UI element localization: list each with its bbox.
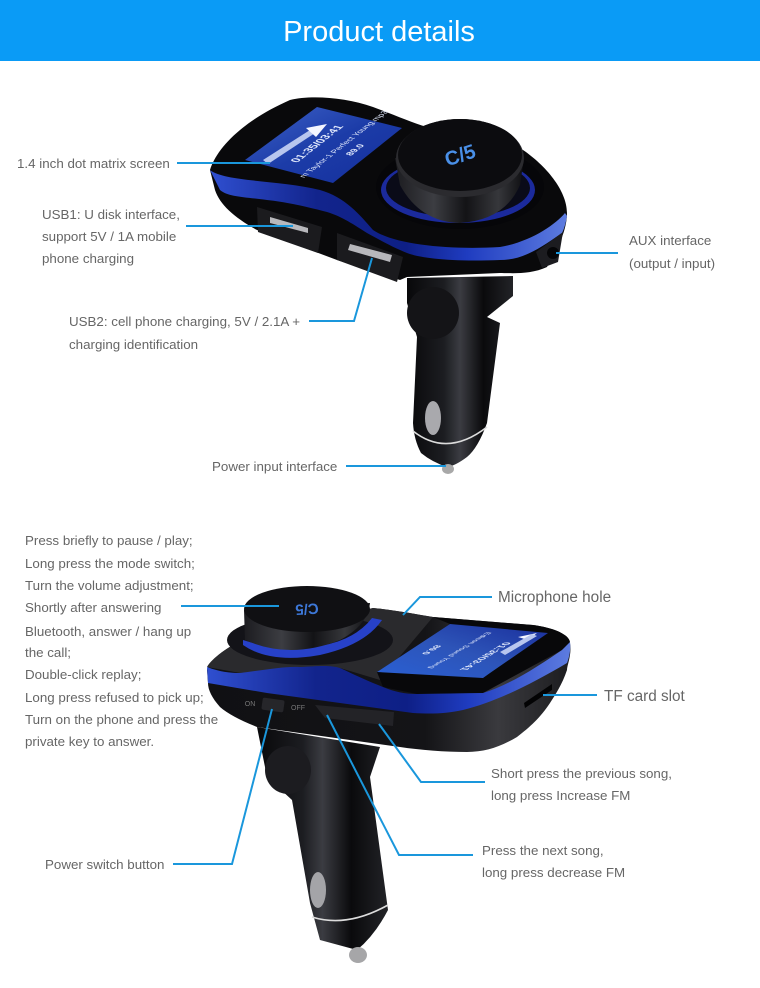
screen: Edison Sound Young (426, 632, 494, 669)
body (210, 97, 567, 280)
label: USB2 (69, 258, 372, 352)
power switch: OFF (291, 705, 305, 712)
knob (227, 615, 393, 665)
product photo: transmitter top view: C/5 (442, 141, 479, 171)
shaft (407, 276, 513, 467)
aux port (536, 232, 563, 268)
blue band (207, 642, 570, 714)
body (207, 608, 570, 752)
label: AUX interface (556, 233, 715, 271)
label: knob functions: Bluetooth, answer / hang up (25, 624, 191, 639)
label: previous song: long press Increase FM (491, 788, 630, 803)
screen: 89.0 (419, 645, 444, 655)
label: knob functions: Turn the volume adjustment; (25, 578, 194, 593)
product photo: transmitter top view (210, 97, 567, 474)
label: USB1: phone charging (42, 251, 134, 266)
power switch (245, 698, 305, 712)
label: power input interface: Power input interface (212, 459, 337, 474)
label: previous song (379, 724, 672, 803)
label: knob functions: Long press refused to pick up; (25, 690, 204, 705)
blue band (210, 170, 567, 261)
usb ports (257, 207, 322, 253)
header banner (0, 0, 760, 61)
label: AUX interface: (output / input) (629, 256, 715, 271)
label: knob functions: private key to answer. (25, 734, 154, 749)
screen: m Taylor-1 Perfect Young.mp3 (297, 110, 391, 178)
screen: 01:35/03:41 (456, 642, 513, 671)
label: knob functions (25, 533, 279, 749)
tf slot (524, 684, 552, 708)
screen: 89.0 (343, 143, 367, 156)
label: knob functions: Double-click replay; (25, 667, 141, 682)
label: USB1: USB1: U disk interface, (42, 207, 180, 222)
label: knob functions: Turn on the phone and press the (25, 712, 218, 727)
label: next song: Press the next song, (482, 843, 604, 858)
product photo: transmitter side view: C/5 (295, 599, 319, 618)
label: USB2: charging identification (69, 337, 198, 352)
buttons (315, 705, 394, 726)
label: TF card slot: TF card slot (604, 688, 685, 705)
label: USB1 (42, 207, 293, 266)
label: next song: long press decrease FM (482, 865, 625, 880)
label: microphone hole: Microphone hole (498, 589, 611, 606)
label: next song (327, 715, 625, 880)
product photo: transmitter side view (207, 586, 570, 963)
label: 1.4 inch dot matrix screen: 1.4 inch dot matrix screen (17, 156, 170, 171)
label: power switch button (45, 709, 272, 872)
screen (377, 624, 548, 678)
label: knob functions: Shortly after answering (25, 600, 161, 615)
screen (245, 107, 402, 183)
label: AUX interface: AUX interface (629, 233, 711, 248)
label: previous song: Short press the previous song, (491, 766, 672, 781)
shaft (257, 727, 388, 950)
screen: 01:35/03:41 (288, 124, 347, 164)
label: USB2: USB2: cell phone charging, 5V / 2.1A + (69, 314, 300, 329)
title: Product details (283, 16, 475, 48)
knob (376, 145, 544, 229)
top surface (207, 608, 433, 680)
label: knob functions: Press briefly to pause / play; (25, 533, 193, 548)
label: USB1: support 5V / 1A mobile (42, 229, 176, 244)
label: knob functions: the call; (25, 645, 71, 660)
label: microphone hole (403, 589, 611, 615)
label: knob functions: Long press the mode switch; (25, 556, 195, 571)
power switch: ON (245, 701, 255, 708)
label: power switch button: Power switch button (45, 857, 164, 872)
